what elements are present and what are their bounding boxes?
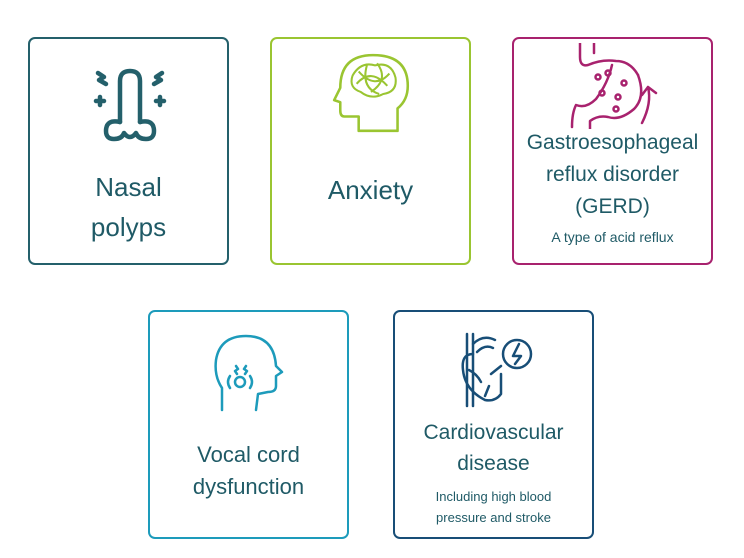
label: Nasal [95,172,162,202]
label: Vocal cord [197,442,300,467]
label: polyps [91,212,166,242]
icon: head with throat [214,334,284,412]
title: Cardiovascular [423,421,564,444]
title: reflux disorder [546,163,679,186]
panel: anxiety [270,37,471,265]
panel: nasal polyps [28,37,229,265]
subtitle: A type of acid reflux [551,229,674,245]
label: Anxiety [328,175,413,205]
icon: nose [94,68,166,142]
title [423,421,564,475]
title: Gastroesophageal [527,131,698,154]
icon: stomach with arrow [570,43,658,129]
panel: vocal cord dysfunction [148,310,349,539]
title [527,131,698,218]
label: dysfunction [193,474,304,499]
title: (GERD) [575,195,650,218]
icon: head with tangled brain [332,54,410,132]
label [193,442,304,499]
panel: cardiovascular disease [393,310,594,539]
icon: heart with lightning [461,332,532,408]
subtitle [436,489,551,525]
subtitle: Including high blood [436,489,551,504]
panel: GERD [512,37,713,265]
subtitle: pressure and stroke [436,510,551,525]
label [91,172,166,242]
title: disease [457,452,530,475]
